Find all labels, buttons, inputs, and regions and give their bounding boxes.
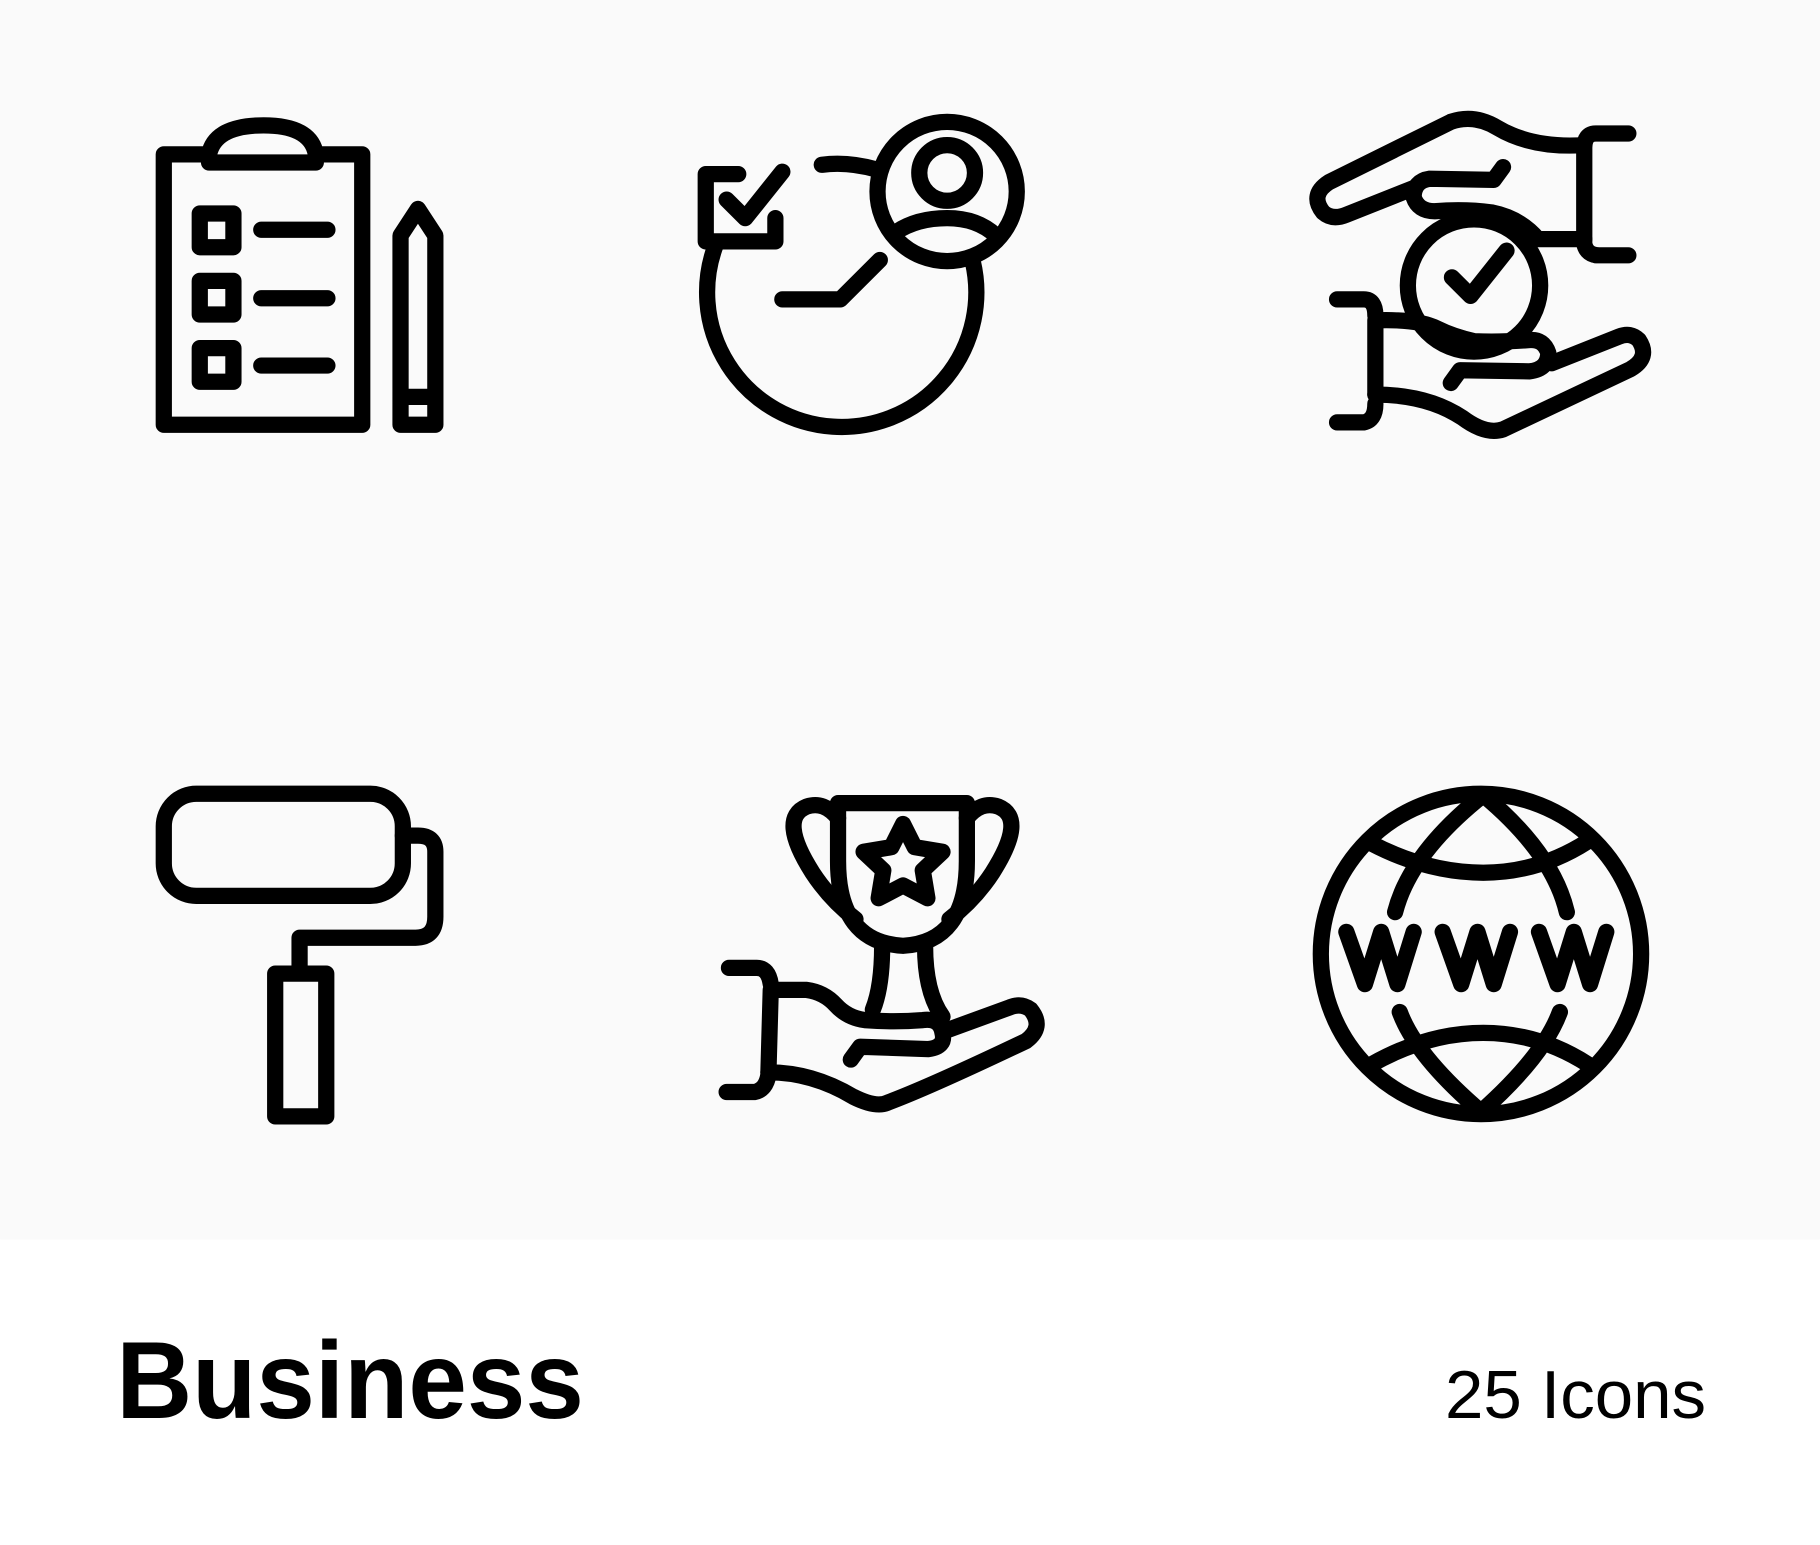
icon: trophy on hand bbox=[727, 803, 1037, 1104]
icon: clipboard with pencil bbox=[164, 125, 435, 425]
icon: clock with person bbox=[706, 122, 1017, 427]
icon: hands holding check bbox=[1317, 119, 1643, 431]
icon: paint roller bbox=[164, 794, 435, 1116]
title: Business bbox=[116, 1320, 584, 1442]
subtitle: icon count: 25 Icons bbox=[1445, 1358, 1706, 1433]
icon: www globe bbox=[1321, 794, 1641, 1114]
